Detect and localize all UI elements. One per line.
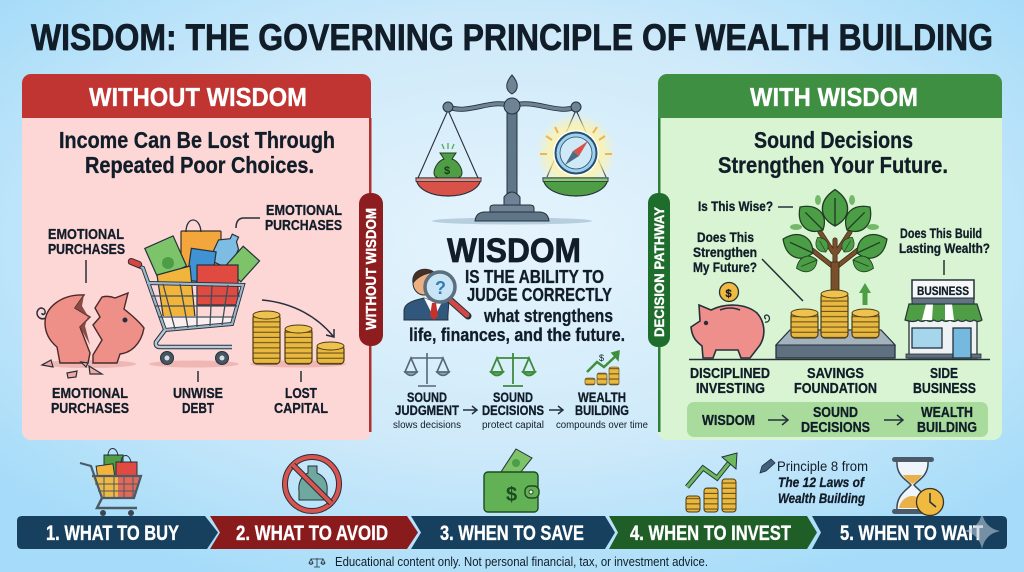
label: unwise debt: DEBT [182,400,214,417]
label: emotional purchases left: EMOTIONAL [48,227,124,243]
icon: storefront business [905,280,982,358]
icon: storefront business: BUSINESS [917,284,969,298]
heading: without wisdom: WITHOUT WISDOM [89,82,307,112]
icon: wallet with cash: $ [506,484,517,506]
icon: pencil [760,459,775,473]
label: unwise debt: UNWISE [173,385,223,402]
step 4: when to invest [609,516,817,549]
icon: piggy bank with coin: $ [726,288,732,300]
side tab: decision pathway [648,193,670,347]
arrow: judgment to decisions [463,406,477,414]
step: sound judgment [393,353,461,431]
subheading: sound decisions: Sound Decisions [754,127,913,153]
icon: savings platform with coins and tree [776,190,895,358]
definition text: IS THE ABILITY TO [465,267,604,287]
step: wealth building: BUILDING [575,403,629,418]
step 3: when to save [411,516,615,549]
icon: shrinking coin stacks [250,300,346,368]
note: principle 8 source: Principle 8 from [777,458,868,474]
label: savings foundation [794,365,877,397]
label: lost capital: LOST [285,385,317,402]
heading: with wisdom: WITH WISDOM [750,82,918,112]
process bar [17,516,1007,549]
step: wealth building: WEALTH [578,390,626,405]
icon: rising chart and coins [686,453,737,512]
step 4: when to invest: 4. WHEN TO INVEST [630,522,791,545]
icon: money bag [434,143,462,179]
icon: shopping cart overflowing [127,220,260,368]
pathway ribbon [687,402,988,437]
label: emotional purchases left [48,227,125,283]
label: does this strengthen [693,229,803,301]
label: disciplined investing: INVESTING [696,380,765,397]
label: lost capital [274,371,328,417]
label: emotional purchases right: PURCHASES [265,218,342,234]
label: purchases bottom: PURCHASES [51,400,129,417]
subheading: income lost: Repeated Poor Choices. [85,152,314,178]
step: sound judgment: JUDGMENT [395,403,460,418]
subheading: sound decisions [718,127,948,178]
note: principle 8 source [777,458,868,506]
icon: gray scales [405,353,449,386]
label: savings foundation: FOUNDATION [794,380,877,397]
side tab: decision pathway: DECISION PATHWAY [651,206,667,337]
panel: without wisdom [22,74,372,440]
footer disclaimer: Educational content only. Not personal financial, tax, or investment advice. [335,555,708,569]
definition text: JUDGE CORRECTLY [467,285,612,305]
label: emotional purchases right [236,203,342,234]
icon: money bag: $ [444,165,450,177]
icon: wallet with cash [484,449,539,512]
label: does this strengthen: Strengthen [693,244,757,260]
label: savings foundation: SAVINGS [807,365,864,382]
side tab: without wisdom: WITHOUT WISDOM [364,208,380,330]
step 2: what to avoid [210,516,418,549]
label: lasting wealth: Does This Build [900,225,982,241]
note: principle 8 source: Wealth Building [778,490,865,506]
panel: with wisdom [658,74,1002,440]
icon: broken piggy bank [37,293,144,378]
step 3: when to save: 3. WHEN TO SAVE [440,522,584,545]
icon: person with magnifying glass [404,269,468,320]
label: is this wise: Is This Wise? [698,198,773,214]
center: scales of wisdom [416,75,616,224]
label: lasting wealth: Lasting Wealth? [899,240,990,256]
step: sound decisions: DECISIONS [482,403,544,418]
note: principle 8 source: The 12 Laws of [778,474,865,490]
label: side business [913,365,976,397]
label: disciplined investing: DISCIPLINED [690,365,770,382]
step: sound judgment: SOUND [407,390,447,405]
definition text: what strengthens [483,306,613,326]
label: lost capital: CAPITAL [274,400,328,417]
icon: glowing compass [536,113,616,193]
step: sound judgment: slows decisions [393,420,461,431]
label: emotional purchases bottom: EMOTIONAL [52,385,128,402]
step: sound decisions: SOUND [493,390,533,405]
step: sound decisions: protect capital [482,420,544,431]
icon: green scales [491,353,535,386]
step 5: when to wait: 5. WHEN TO WAIT [840,522,983,545]
icon: hourglass with clock [892,457,944,516]
pathway ribbon: WISDOM [702,412,755,429]
pathway ribbon: BUILDING [917,419,977,436]
icon: mini cart [80,448,141,516]
icon: tree [778,190,892,294]
icon: prohibited bottle [285,457,339,511]
side tab: without wisdom [359,193,383,346]
heading: wisdom: WISDOM [447,232,581,270]
subheading: sound decisions: Strengthen Your Future. [718,152,948,178]
label: side business: BUSINESS [913,380,976,397]
label: unwise debt [173,371,223,417]
label: does this strengthen: My Future? [693,259,757,275]
pathway ribbon: DECISIONS [801,419,870,436]
label: side business: SIDE [930,365,958,382]
step: wealth building [556,351,648,431]
step: wealth building: compounds over time [556,420,648,431]
icon: growth chart and coins: $ [599,353,604,363]
ground line [689,358,990,360]
step: sound decisions [482,353,544,431]
label: lasting wealth [899,225,990,275]
step 5: when to wait [812,516,1007,549]
subheading: income lost [59,127,335,178]
icon: piggy bank with coin [691,282,769,358]
pathway ribbon: SOUND [813,404,858,421]
step 1: what to buy [17,516,218,549]
definition text [409,267,625,345]
label: emotional purchases right: EMOTIONAL [266,203,342,219]
pathway ribbon: WEALTH [921,404,973,421]
icon: person with magnifying glass: ? [435,278,446,298]
subheading: income lost: Income Can Be Lost Through [59,127,335,153]
step 1: what to buy: 1. WHAT TO BUY [46,522,179,545]
definition text: life, finances, and the future. [409,325,625,345]
label: disciplined investing [690,365,770,397]
decorative sparkle [964,513,1000,549]
step 2: what to avoid: 2. WHAT TO AVOID [236,522,388,545]
label: does this strengthen: Does This [697,229,754,245]
label: emotional purchases left: PURCHASES [48,242,125,258]
arrow: decisions to wealth [549,406,563,414]
